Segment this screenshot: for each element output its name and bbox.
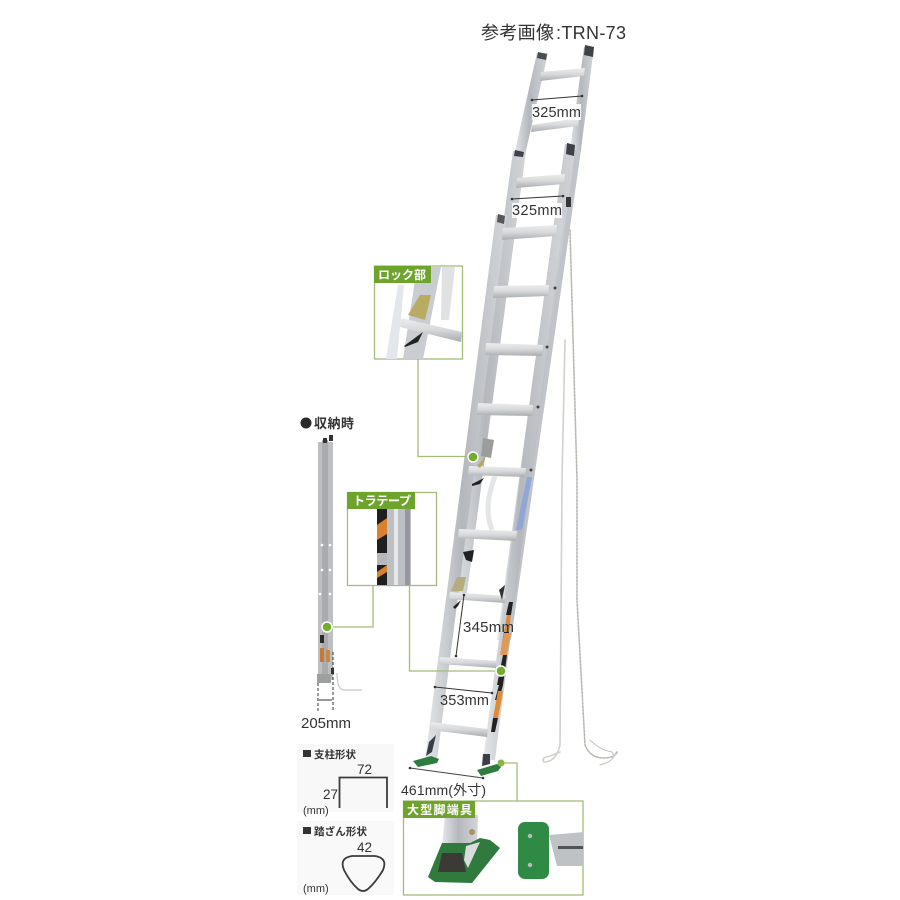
panel: post section: 72 [357,762,372,777]
top section [505,45,594,640]
stored ladder heading: 収納時 [314,416,354,431]
title: 参考画像 [481,23,554,43]
lock leader [418,359,473,456]
stored ladder [317,435,362,690]
lock hardware [451,438,505,609]
panel: post section: (mm) [303,805,329,817]
middle section [452,143,576,640]
dimension: 353mm: 353mm [440,693,489,709]
panel: post section: 27 [323,787,338,802]
dimension: 205mm: 205mm [301,715,351,732]
dimension: 345mm: 345mm [463,619,514,636]
title: :TRN-73 [556,23,626,43]
callout: tiger tape [327,492,501,671]
panel: post section: 支柱形状 [314,748,356,761]
feet [413,735,501,776]
rope [543,230,617,765]
foot leader [501,763,517,801]
dimension: 325mm upper: 325mm [532,105,581,121]
tape label: トラテープ [353,494,411,508]
lock label [374,266,431,283]
dimension: 325mm lower: 325mm [512,203,562,219]
dimension: 353mm [434,686,493,709]
blue label [516,477,532,530]
foot photo [428,815,584,883]
dimension: 325mm lower [511,195,564,219]
post profile [340,778,387,808]
panel: rung section: (mm) [303,883,329,895]
tiger tape [491,602,513,732]
dimension: 461mm outer [401,767,486,798]
tape leader to main ladder [410,586,501,671]
lower section [425,214,564,760]
title [481,23,626,43]
tape leader to stored ladder [327,586,373,627]
panel: rung section: 踏ざん形状 [314,825,368,838]
dimension: 345mm [455,594,514,657]
lock photo [386,267,462,359]
dot: tape stored [322,622,332,632]
handle loop [488,476,495,530]
dot: foot [498,760,504,766]
dimension: 325mm upper [531,95,583,121]
main ladder [413,45,594,776]
panel: post section [297,744,394,817]
rung profile [343,856,384,891]
panel: rung section: 42 [357,840,372,855]
foot label: 大型脚端具 [407,802,472,817]
dot: lock [468,452,478,462]
tape photo [377,509,411,585]
dimension: 461mm outer: 461mm(外寸) [401,782,486,798]
dimension: 205mm [301,652,351,732]
dot: tape main [496,666,506,676]
panel: rung section [297,821,394,895]
callout: lock [374,266,473,456]
lock label: ロック部 [378,267,426,282]
callout: large foot [403,763,584,895]
